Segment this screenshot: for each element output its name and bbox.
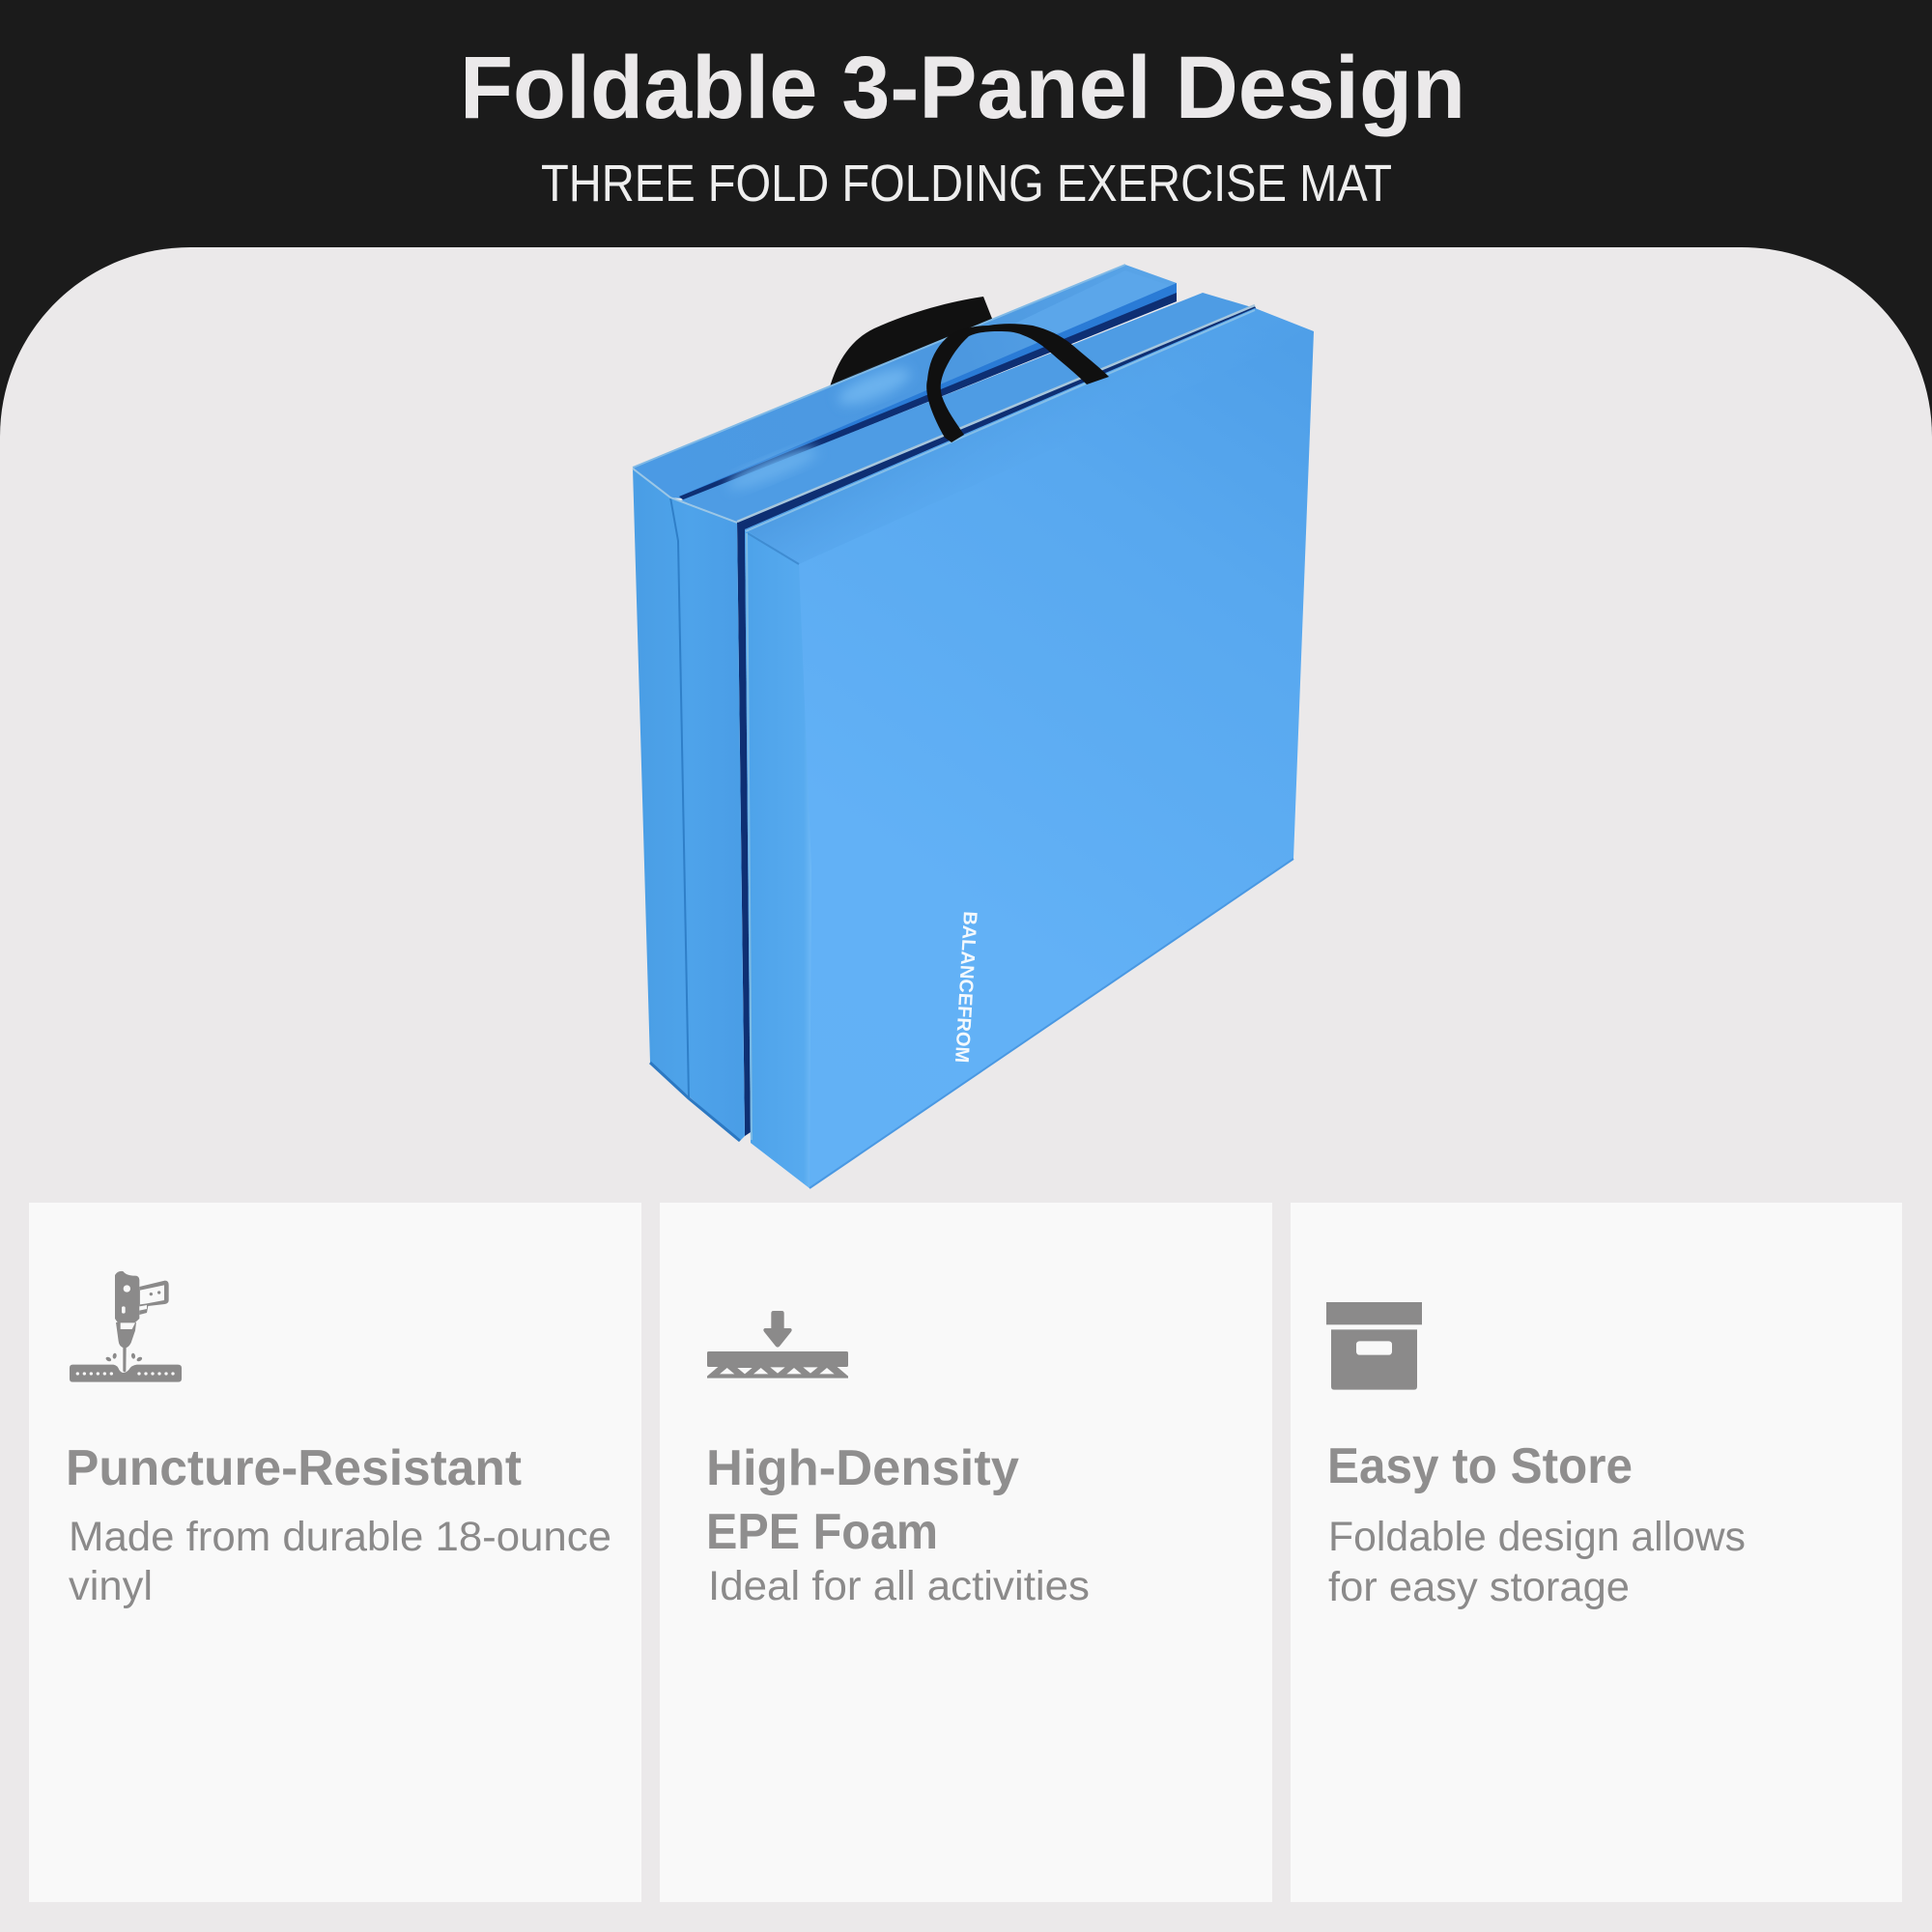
heading: EPE Foam [706, 1504, 938, 1560]
brand label: BALANCEFROM [951, 911, 980, 1064]
dark gap behind front panel [737, 306, 1257, 1136]
card: high-density foam [660, 1203, 1272, 1902]
folded blue exercise mat product [633, 265, 1314, 1188]
left spine faces [633, 469, 745, 1141]
spine corner seam [633, 469, 737, 523]
highlight on top panel [1005, 270, 1171, 333]
heading: High-Density [706, 1440, 1019, 1496]
top groove shadow [679, 293, 1177, 500]
subtitle: THREE FOLD FOLDING EXERCISE MAT [541, 155, 1392, 213]
description: Made from durable 18-ounce [69, 1514, 611, 1560]
description: for easy storage [1328, 1564, 1630, 1610]
description: Foldable design allows [1328, 1514, 1746, 1560]
icon: drill piercing surface [70, 1271, 182, 1382]
front handle strap [926, 324, 1109, 442]
top panel stitching [633, 265, 1125, 468]
middle panel stitching [737, 305, 1255, 522]
top fold highlight [834, 361, 915, 412]
icon: storage box [1326, 1302, 1422, 1390]
title: Foldable 3-Panel Design [460, 39, 1465, 137]
top groove [679, 283, 1177, 500]
middle top panel [681, 293, 1255, 524]
description: Ideal for all activities [708, 1563, 1090, 1609]
middle panel fold highlight [724, 441, 821, 496]
front lower edge [810, 859, 1293, 1188]
description: vinyl [69, 1563, 153, 1609]
bottom seam [650, 1063, 740, 1141]
front top bevel shading [745, 308, 1314, 564]
front corner seam [748, 533, 799, 564]
card background [660, 1203, 1272, 1902]
front stitching [746, 310, 1255, 531]
card background [1291, 1203, 1902, 1902]
spine stitching [670, 497, 689, 1098]
description [69, 1514, 611, 1609]
front left seam [747, 533, 752, 1140]
front panel [745, 308, 1314, 1188]
back handle strap [829, 297, 998, 406]
card background [29, 1203, 641, 1902]
card: puncture-resistant [29, 1203, 641, 1902]
heading: Easy to Store [1327, 1438, 1633, 1494]
heading: Puncture-Resistant [66, 1440, 522, 1496]
card: easy to store [1291, 1203, 1902, 1902]
icon: pressure on foam [707, 1311, 848, 1378]
heading [706, 1440, 1019, 1560]
back top panel [633, 265, 1177, 498]
front panel left strip [745, 529, 811, 1188]
description [1328, 1514, 1746, 1610]
